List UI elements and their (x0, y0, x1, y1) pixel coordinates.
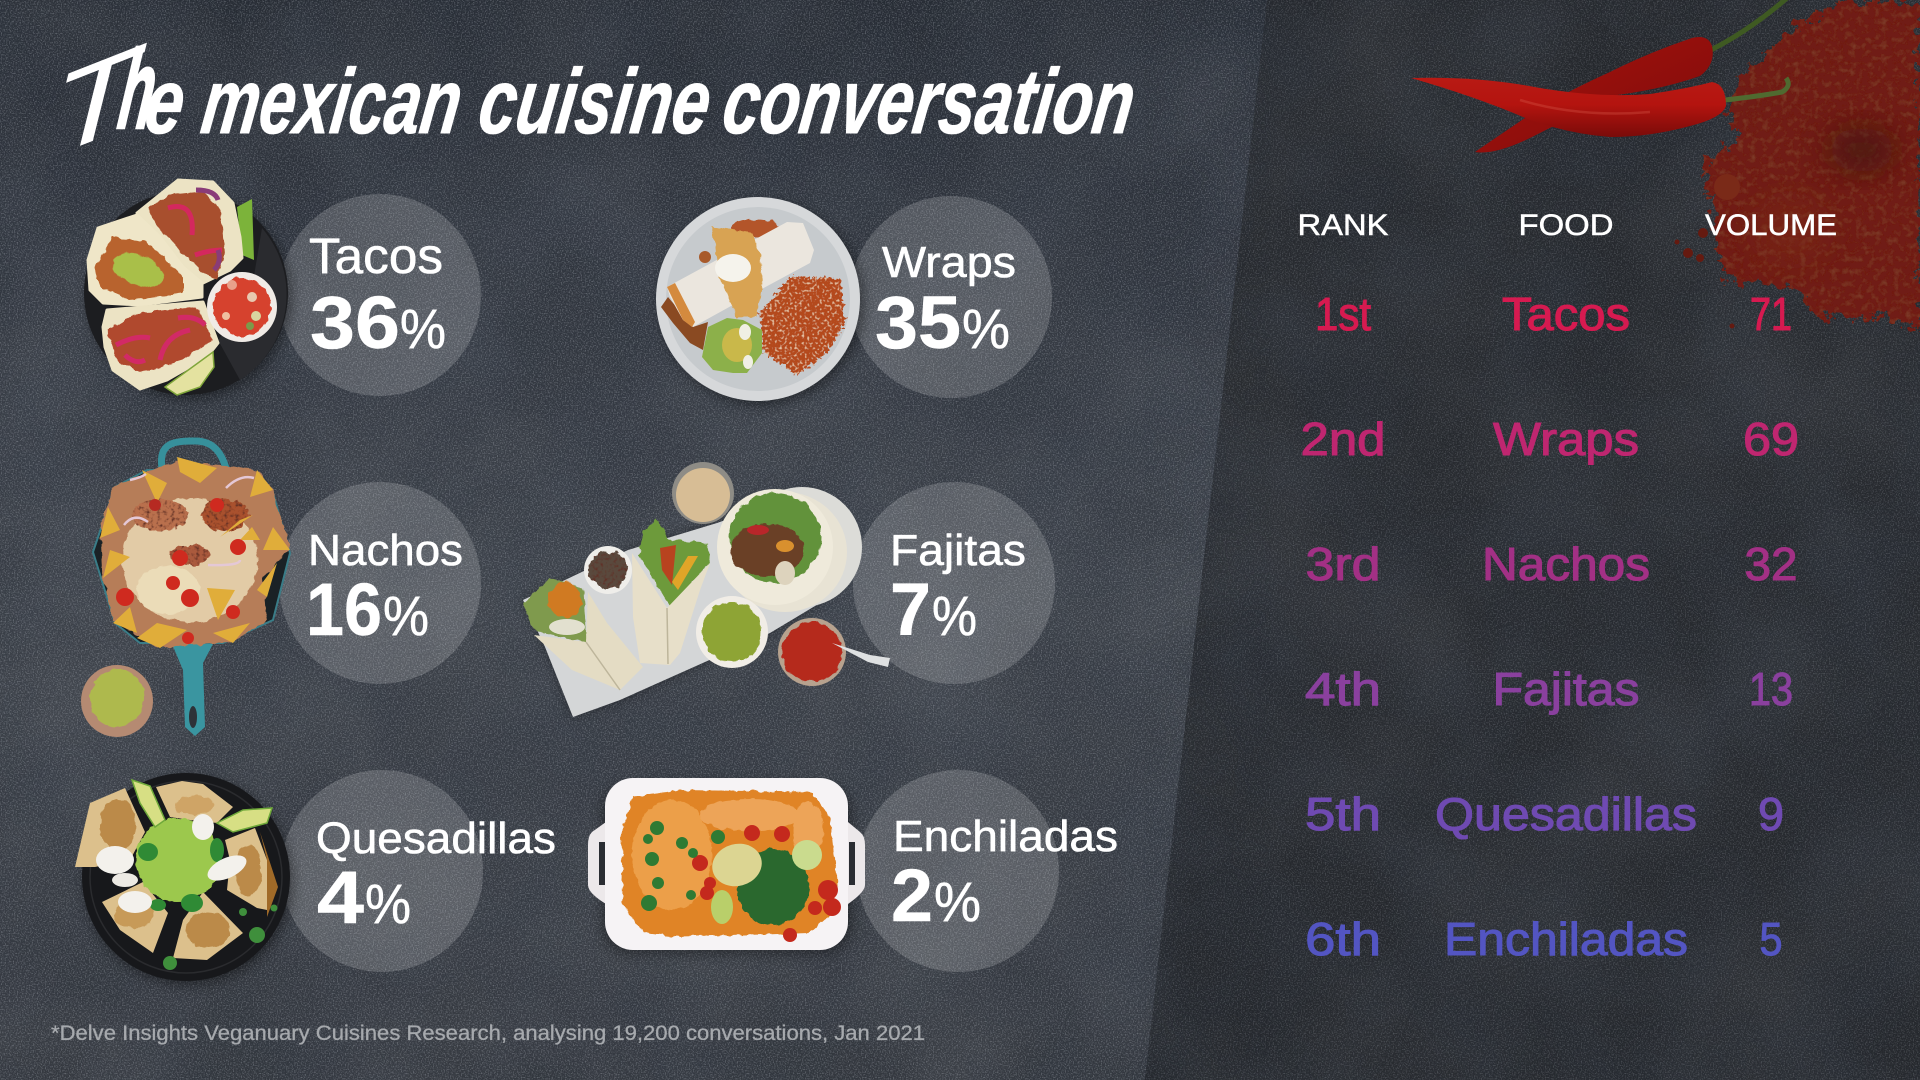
stat: fajitas 7%: 7 (890, 568, 931, 651)
stat: tacos 36%: % (400, 297, 446, 360)
back chili (1475, 37, 1713, 152)
seed bowl (584, 546, 632, 594)
guacamole (136, 818, 220, 902)
title: mexican (196, 49, 469, 153)
row 6: enchiladas: 5 (1760, 913, 1782, 965)
row 1: tacos (1315, 288, 1792, 340)
guacamole bowl (696, 596, 768, 668)
row 2: wraps: 2nd (1300, 413, 1386, 465)
stat: nachos 16%: Nachos (308, 526, 463, 575)
nacho pile (100, 460, 290, 647)
top taco (137, 180, 242, 283)
background: left stone panel (0, 0, 1267, 1080)
table header: RANK (1298, 209, 1388, 242)
stat: enchiladas 2%: Enchiladas (893, 812, 1118, 861)
dish body (605, 778, 848, 950)
spoon (832, 643, 890, 667)
row 6: enchiladas (1305, 913, 1782, 965)
wrap right filling (640, 520, 710, 607)
ranking table (1298, 209, 1837, 965)
circle: nachos (279, 482, 481, 684)
row 1: tacos: 71 (1750, 288, 1792, 340)
title: e (139, 49, 192, 153)
row 3: nachos: 3rd (1306, 538, 1380, 590)
chips (100, 457, 290, 648)
tomatoes (172, 550, 188, 566)
front chili stem (1725, 78, 1788, 100)
stat: tacos 36%: 36 (310, 281, 400, 364)
stat: nachos 16%: 16 (306, 568, 382, 651)
row 4: fajitas: 4th (1305, 663, 1381, 715)
circle: fajitas (853, 482, 1055, 684)
board (523, 490, 850, 717)
food: enchiladas dish (588, 778, 865, 954)
sour cream (96, 846, 134, 874)
row 4: fajitas: 13 (1749, 663, 1793, 715)
wedge toasted centres (100, 799, 136, 851)
chili powder pile (1674, 0, 1920, 330)
food: fajitas board (523, 462, 890, 717)
tomatoes (744, 825, 760, 841)
lime slices (792, 840, 822, 870)
source footnote: *Delve Insights Veganuary Cuisines Research, analysing 19,200 conversations, Jan 2021 (51, 1022, 925, 1045)
row 5: quesadillas (1305, 788, 1784, 840)
skillet handles (161, 441, 226, 468)
title: cuisine (473, 49, 718, 153)
food: nachos skillet (81, 441, 290, 737)
row 2: wraps: Wraps (1493, 413, 1639, 465)
table header (1298, 209, 1837, 242)
wrap right tortilla (632, 553, 710, 665)
skillet body (93, 470, 290, 643)
enchilada filling (622, 790, 837, 937)
stat: quesadillas 4%: % (365, 872, 411, 935)
row 6: enchiladas: 6th (1305, 913, 1381, 965)
stat: nachos 16% (306, 526, 463, 651)
bottom taco (103, 302, 218, 389)
hummus bowl (672, 462, 734, 524)
stat: enchiladas 2%: % (934, 870, 981, 933)
row 5: quesadillas: 9 (1758, 788, 1784, 840)
stat: tacos 36%: Tacos (309, 228, 443, 284)
stat: fajitas 7%: Fajitas (890, 526, 1026, 575)
row 5: quesadillas: Quesadillas (1435, 788, 1697, 840)
circle: wraps (850, 196, 1052, 398)
stat: wraps 35% (875, 238, 1016, 364)
row 3: nachos (1306, 538, 1798, 590)
wedges (75, 781, 267, 960)
food: wraps plate (656, 197, 864, 405)
stat: wraps 35%: Wraps (882, 238, 1016, 287)
row 6: enchiladas: Enchiladas (1444, 913, 1688, 965)
stat: wraps 35%: 35 (875, 281, 961, 364)
beans above (731, 219, 779, 237)
stat: nachos 16%: % (383, 584, 429, 647)
row 4: fajitas (1305, 663, 1793, 715)
wrap left tortilla (534, 592, 643, 690)
salsa bowl (778, 618, 846, 686)
greens (737, 849, 809, 925)
background: right dark panel (1145, 0, 1920, 1080)
limes (132, 780, 165, 827)
food: tacos plate (84, 180, 292, 399)
row 1: tacos: Tacos (1502, 288, 1630, 340)
stat: quesadillas 4%: Quesadillas (316, 814, 556, 863)
wrap left filling (523, 578, 588, 643)
table header: VOLUME (1705, 209, 1837, 242)
stat: quesadillas 4%: 4 (317, 856, 364, 939)
onion rings (124, 474, 254, 565)
row 1: tacos: 1st (1315, 288, 1371, 340)
salsa bowl (207, 272, 277, 342)
back chili stem (1711, 0, 1787, 50)
guacamole bowl (81, 665, 153, 737)
stat: fajitas 7% (890, 526, 1026, 651)
circle: enchiladas (857, 770, 1059, 972)
lime wedge bottom (165, 352, 214, 395)
burrito (667, 222, 814, 327)
herbs (249, 927, 265, 943)
stat: fajitas 7%: % (932, 584, 977, 647)
dish handles (588, 822, 606, 904)
stat: quesadillas 4% (316, 814, 556, 939)
food: quesadillas plate (75, 773, 293, 985)
stat: enchiladas 2%: 2 (891, 854, 933, 937)
stat: tacos 36% (309, 228, 446, 364)
title (37, 15, 1142, 187)
row 5: quesadillas: 5th (1305, 788, 1381, 840)
rice (760, 277, 845, 375)
herb leaves (650, 821, 664, 835)
front chili (1411, 78, 1726, 137)
lime wedge top (237, 199, 254, 260)
row 3: nachos: Nachos (1482, 538, 1650, 590)
stat: wraps 35%: % (962, 297, 1010, 360)
left taco (88, 215, 202, 305)
fajita tortilla (742, 487, 862, 607)
table header: FOOD (1518, 209, 1614, 242)
row 2: wraps (1300, 413, 1799, 465)
crust (260, 832, 278, 917)
avocado (702, 318, 762, 373)
chili peppers (1411, 0, 1788, 152)
circle: tacos (279, 194, 481, 396)
circle: quesadillas (281, 770, 483, 972)
cheese strip (712, 226, 763, 318)
stat: enchiladas 2% (891, 812, 1118, 937)
sour cream (715, 254, 751, 282)
row 4: fajitas: Fajitas (1492, 663, 1640, 715)
row 2: wraps: 69 (1743, 413, 1799, 465)
row 3: nachos: 32 (1744, 538, 1798, 590)
title: T (37, 15, 157, 187)
title: h (113, 26, 164, 152)
title: conversation (717, 49, 1142, 153)
avocado fan (707, 838, 767, 892)
refried sauce (661, 297, 708, 350)
